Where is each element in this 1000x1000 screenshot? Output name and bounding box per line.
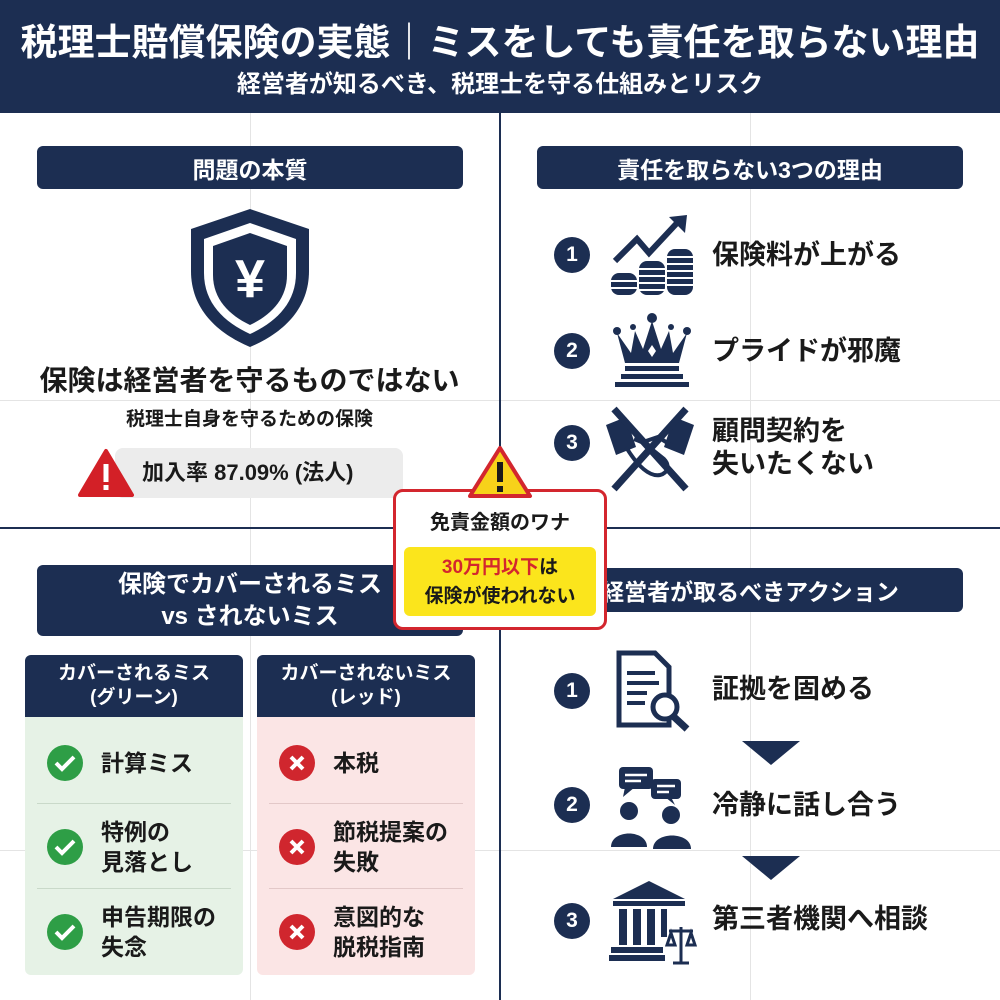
- item: 意図的な: [333, 904, 425, 930]
- heading: [37, 146, 463, 189]
- action 1: 1: [566, 679, 578, 702]
- item: 申告期限の: [101, 904, 216, 930]
- stat pill: 加入率 87.09% (法人): [142, 460, 354, 485]
- icon: document search: [616, 650, 690, 732]
- callout title: 免責金額のワナ: [430, 512, 570, 534]
- icon: crossed handshake: [606, 406, 694, 492]
- heading: 責任を取らない3つの理由: [617, 156, 883, 182]
- item: [279, 819, 448, 875]
- panel: covered vs not: [37, 565, 463, 636]
- column: not covered: カバーされないミス: [280, 663, 452, 684]
- reason 3: [554, 406, 874, 492]
- header: [0, 0, 1000, 113]
- reason 1: [554, 215, 901, 295]
- action 2: [554, 767, 901, 849]
- action 2: 冷静に話し合う: [712, 790, 901, 820]
- sub statement: 税理士自身を守るための保険: [126, 409, 373, 430]
- icon: shield yen: [191, 209, 309, 347]
- icon: shield yen: ¥: [235, 249, 265, 309]
- column: not covered: [257, 655, 475, 975]
- background grid: [250, 113, 251, 1000]
- reason 1: 保険料が上がる: [712, 240, 901, 270]
- action 3: 第三者機関へ相談: [712, 904, 928, 934]
- action 1: [554, 650, 874, 732]
- item: 見落とし: [101, 849, 193, 875]
- item: 失念: [101, 934, 147, 960]
- reason 2: 2: [566, 339, 578, 362]
- item: 節税提案の: [333, 819, 448, 845]
- icon: courthouse: [609, 881, 697, 964]
- heading: [537, 146, 963, 189]
- main statement: 保険は経営者を守るものではない: [39, 365, 460, 396]
- callout highlight: 30万円以下は: [442, 557, 558, 578]
- subtitle: 経営者が知るべき、税理士を守る仕組みとリスク: [237, 71, 763, 98]
- item: [47, 745, 193, 781]
- item: 脱税指南: [333, 934, 425, 960]
- heading: 問題の本質: [192, 156, 308, 182]
- column: covered: (グリーン): [90, 687, 178, 708]
- panel: problem essence: [37, 146, 463, 498]
- title: 税理士賠償保険の実態｜ミスをしても責任を取らない理由: [20, 22, 980, 63]
- reason 1: 1: [566, 243, 578, 266]
- item: [47, 819, 193, 875]
- reason 3: 3: [566, 431, 578, 454]
- column: not covered: (レッド): [331, 687, 401, 708]
- reason 2: プライドが邪魔: [712, 336, 901, 366]
- heading: 経営者が取るべきアクション: [601, 579, 899, 605]
- item: 本税: [333, 750, 379, 776]
- arrow: [742, 741, 800, 765]
- reason 3: 失いたくない: [712, 449, 874, 479]
- dividers: [499, 113, 501, 1000]
- panel: actions: [554, 568, 963, 964]
- item: 特例の: [101, 819, 170, 845]
- item: 計算ミス: [101, 750, 193, 776]
- icon: people talking: [611, 767, 691, 849]
- callout highlight: 保険が使われない: [424, 586, 576, 607]
- icon: rising coins: [611, 215, 693, 295]
- heading: [537, 568, 963, 612]
- arrow: [742, 856, 800, 880]
- icon: warning: [78, 448, 134, 497]
- action 3: [554, 881, 928, 964]
- action 2: 2: [566, 793, 578, 816]
- heading: [37, 565, 463, 636]
- stat pill: [78, 448, 403, 498]
- column: covered: カバーされるミス: [58, 663, 210, 684]
- heading: vs されないミス: [161, 602, 339, 630]
- callout: deductible trap: [393, 446, 607, 630]
- action 1: 証拠を固める: [712, 674, 874, 704]
- panel: three reasons: [537, 146, 963, 492]
- action 3: 3: [566, 909, 578, 932]
- item: [279, 904, 425, 960]
- icon: crown: [613, 313, 691, 387]
- callout highlight: [404, 547, 596, 616]
- column: covered: [25, 655, 243, 975]
- heading: 保険でカバーされるミス: [118, 570, 382, 598]
- item: 失敗: [333, 849, 379, 875]
- reason 3: 顧問契約を: [712, 416, 847, 446]
- icon: warning: [468, 446, 532, 498]
- item: [279, 745, 379, 781]
- item: [47, 904, 216, 960]
- reason 2: [554, 313, 901, 387]
